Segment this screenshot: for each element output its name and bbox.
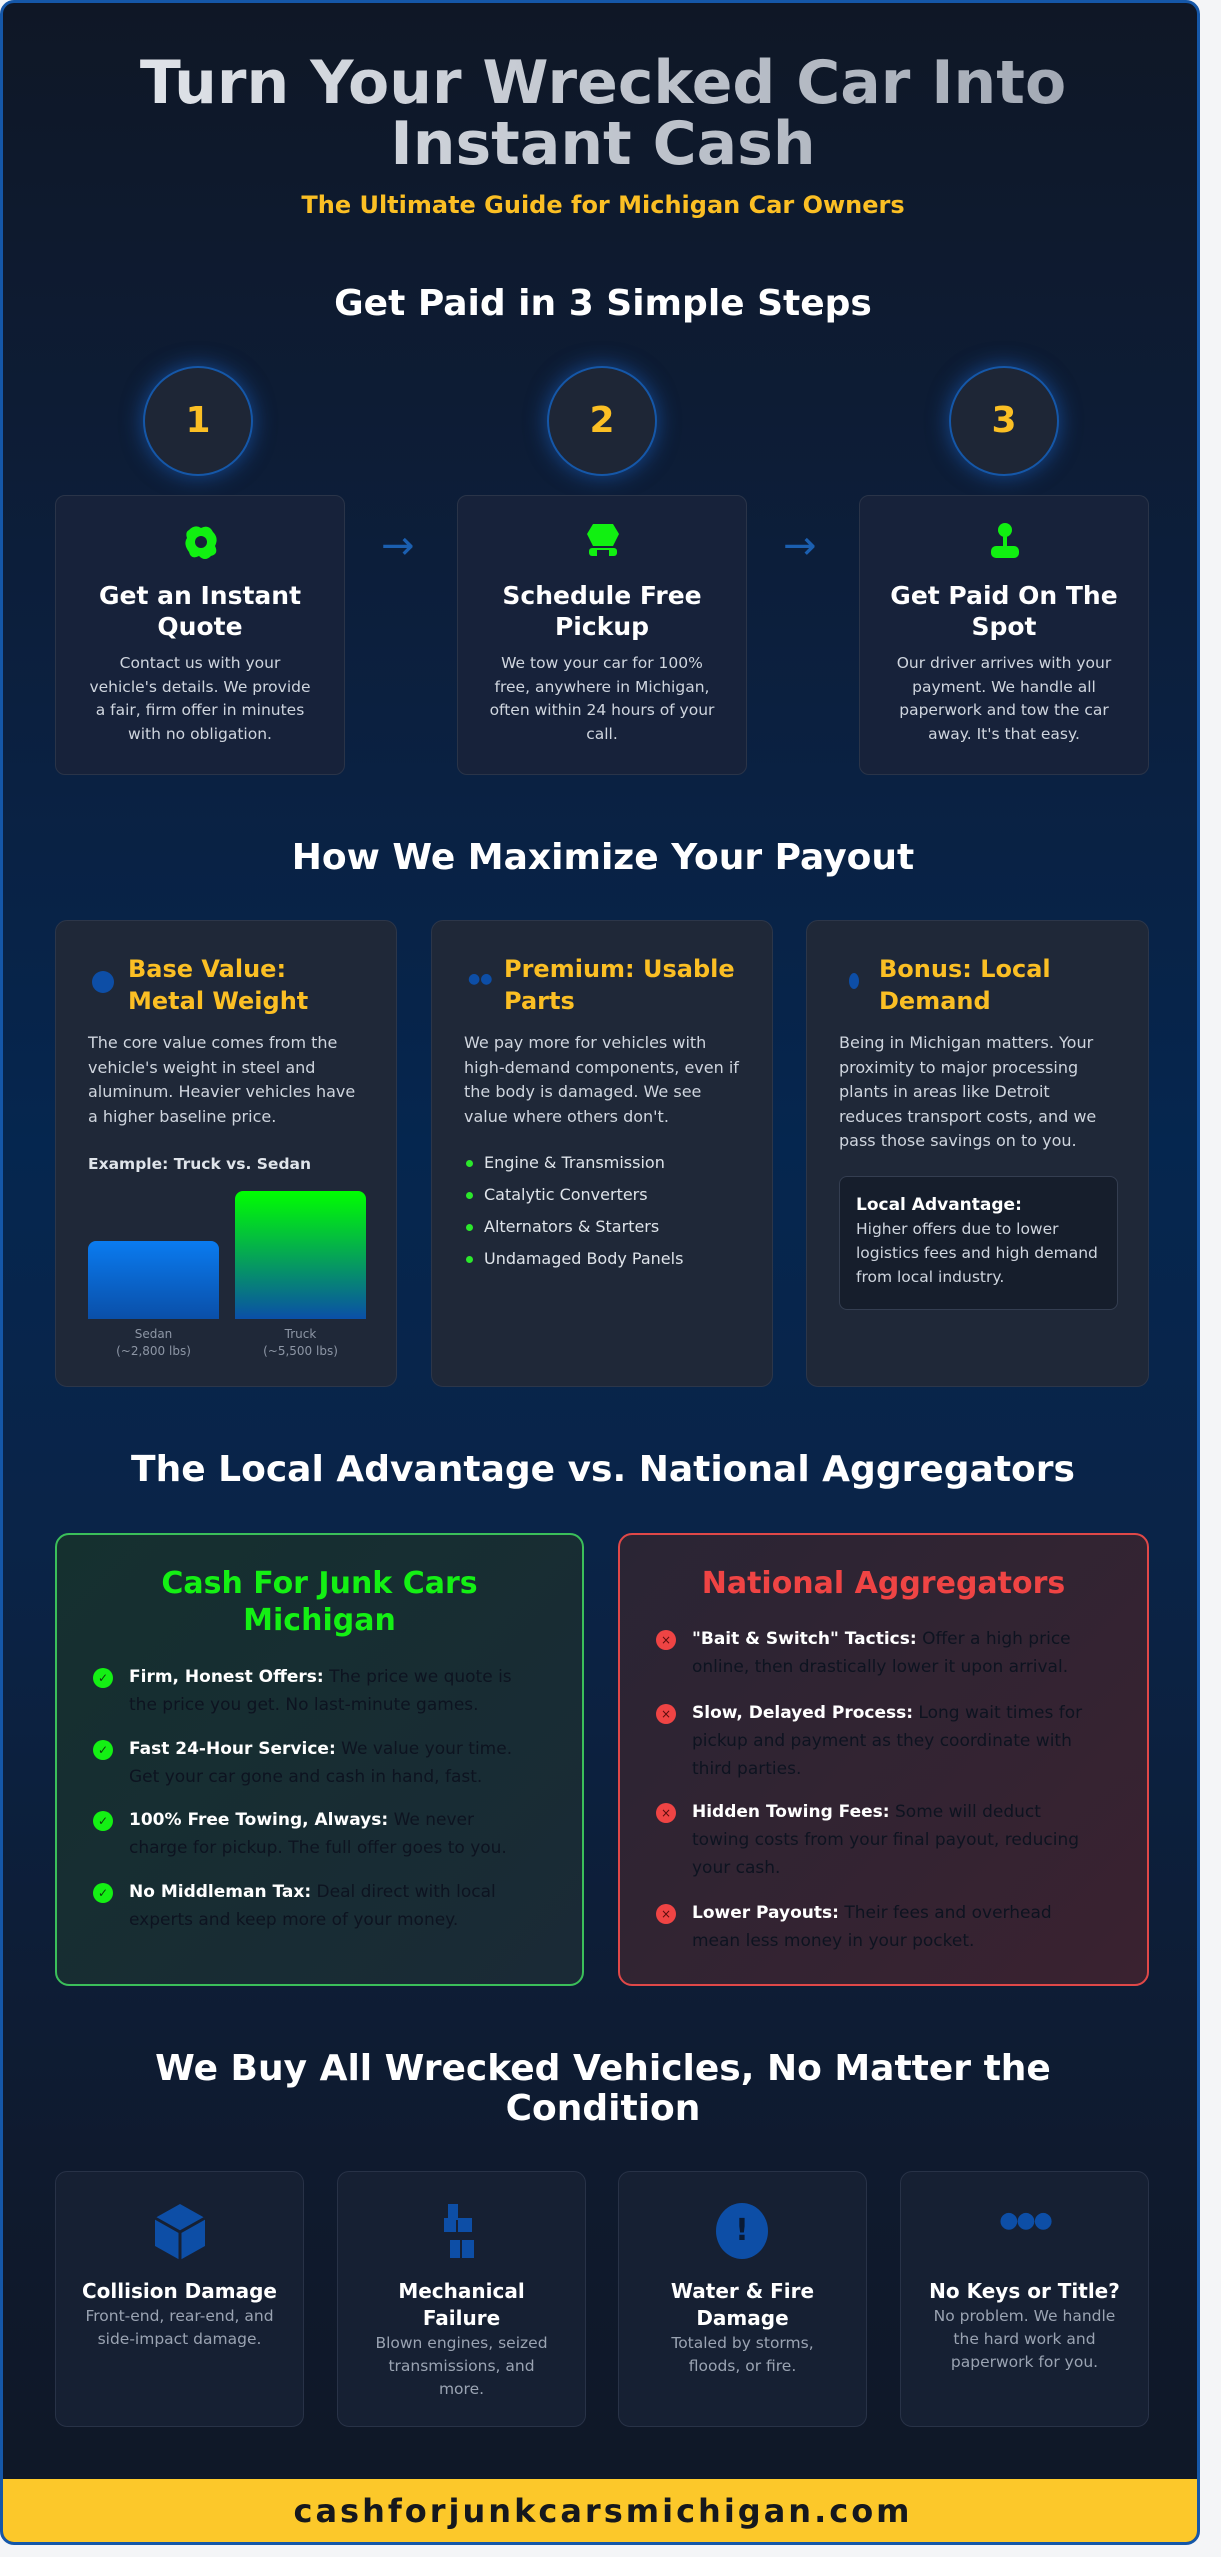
- step circle 3: 3: [991, 400, 1017, 441]
- card: collision: Front-end, rear-end, and: [85, 2307, 274, 2325]
- bar chart: (~2,800 lbs): [116, 1344, 191, 1358]
- chart label: Example: Truck vs. Sedan: [88, 1155, 311, 1173]
- green heading: [161, 1566, 478, 1638]
- footer: [3, 2479, 1203, 2549]
- heading: we buy all: We Buy All Wrecked Vehicles, No Matter the Condition: [155, 2048, 1051, 2129]
- step card 1: [55, 495, 345, 775]
- item: Firm, Honest Offers: The price we quote is the price you get. No last-minute games.: [129, 1667, 512, 1715]
- green heading: Michigan: [243, 1603, 396, 1638]
- step circle 1: [143, 366, 253, 476]
- step card 2: [457, 495, 747, 775]
- card: no keys: No problem. We handle: [934, 2307, 1115, 2325]
- icon: parts: ●●: [468, 971, 492, 987]
- card: mechanical: more.: [439, 2380, 484, 2398]
- panel: us: ✓: [98, 1743, 108, 1757]
- step circle 1: 1: [185, 400, 211, 441]
- title: [3, 53, 1203, 175]
- card: mechanical: Blown engines, seized: [375, 2334, 548, 2352]
- footer: cashforjunkcarsmichigan.com: [293, 2492, 913, 2530]
- step card 1: Contact us with your vehicle's details. We provide a fair, firm offer in minutes with no obligation.: [89, 654, 311, 742]
- item: Hidden Towing Fees: Some will deduct towing costs from your final payout, reducing your cash.: [692, 1802, 1079, 1878]
- panel: premium parts: We pay more for vehicles with high-demand components, even if the body is damaged. We see value where others don't.: [464, 1033, 739, 1126]
- parts list: Engine & Transmission: [484, 1153, 665, 1172]
- panel: aggregators: ×: [661, 1907, 671, 1921]
- panel: us: ✓: [98, 1814, 108, 1828]
- card: water fire: Water & Fire: [671, 2279, 814, 2303]
- item: No Middleman Tax: Deal direct with local experts and keep more of your money.: [129, 1882, 496, 1930]
- card: no keys: the hard work and: [953, 2330, 1096, 2348]
- panel: local demand: Being in Michigan matters. Your proximity to major processing plants in areas like Detroit reduces transport costs, and we pass those savings on to you.: [839, 1033, 1096, 1150]
- subtitle: The Ultimate Guide for Michigan Car Owners: [301, 191, 905, 219]
- panel: local demand: [806, 920, 1149, 1387]
- callout: local advantage: [839, 1176, 1118, 1310]
- heading: steps: Get Paid in 3 Simple Steps: [334, 283, 872, 324]
- icon: cube: [155, 2204, 205, 2260]
- panel: local demand: Bonus: Local Demand: [879, 955, 1051, 1015]
- card: water fire: floods, or fire.: [689, 2357, 796, 2375]
- card: water fire: Totaled by storms,: [671, 2334, 814, 2352]
- item: Slow, Delayed Process: Long wait times for pickup and payment as they coordinate with third parties.: [692, 1703, 1082, 1779]
- title: Turn Your Wrecked Car Into: [140, 48, 1066, 118]
- card: mechanical: [337, 2171, 586, 2427]
- panel: us: [55, 1533, 584, 1986]
- parts list: Catalytic Converters: [484, 1185, 648, 1204]
- item: Lower Payouts: Their fees and overhead mean less money in your pocket.: [692, 1903, 1052, 1951]
- step card 3: Get Paid On The Spot: [890, 581, 1118, 641]
- icon: alert: !: [735, 2213, 749, 2248]
- panel: aggregators: ×: [661, 1633, 671, 1647]
- item: Fast 24-Hour Service: We value your time. Get your car gone and cash in hand, fast.: [129, 1739, 512, 1787]
- icon: pin: [991, 523, 1019, 558]
- icon: coin: [92, 971, 114, 993]
- icon: location: [849, 973, 859, 989]
- bar chart: Truck: [285, 1327, 316, 1341]
- bar chart: Sedan: [135, 1327, 172, 1341]
- callout: local advantage: Local Advantage:: [856, 1195, 1022, 1215]
- panel: aggregators: [618, 1533, 1149, 1986]
- step card 3: [859, 495, 1149, 775]
- green heading: Cash For Junk Cars: [161, 1566, 478, 1601]
- callout: local advantage: Higher offers due to lower logistics fees and high demand from local industry.: [856, 1220, 1098, 1286]
- panel: premium parts: Premium: Usable Parts: [504, 955, 735, 1015]
- title: Instant Cash: [390, 109, 816, 179]
- card: mechanical: Mechanical: [398, 2279, 525, 2303]
- panel: aggregators: ×: [661, 1707, 671, 1721]
- panel: premium parts: [431, 920, 773, 1387]
- heading: payout: How We Maximize Your Payout: [292, 837, 914, 878]
- arrow 2: →: [783, 523, 817, 569]
- parts list: [466, 1153, 683, 1268]
- panel: base value: [55, 920, 397, 1387]
- step card 2: We tow your car for 100% free, anywhere in Michigan, often within 24 hours of your call.: [490, 654, 714, 742]
- card: mechanical: transmissions, and: [388, 2357, 535, 2375]
- item: "Bait & Switch" Tactics: Offer a high price online, then drastically lower it upon arrival.: [692, 1629, 1071, 1677]
- panel: us: ✓: [98, 1886, 108, 1900]
- parts list: Undamaged Body Panels: [484, 1249, 683, 1268]
- card: no keys: paperwork for you.: [951, 2353, 1098, 2371]
- card: no keys: [900, 2171, 1149, 2427]
- card: collision: [55, 2171, 304, 2427]
- panel: base value: The core value comes from the vehicle's weight in steel and aluminum. Heavier vehicles have a higher baseline price.: [88, 1033, 355, 1126]
- icon: truck: [587, 524, 619, 556]
- step circle 2: 2: [589, 400, 615, 441]
- bar chart: (~5,500 lbs): [263, 1344, 338, 1358]
- parts list: Alternators & Starters: [484, 1217, 659, 1236]
- heading: comparison: The Local Advantage vs. National Aggregators: [131, 1449, 1075, 1490]
- step circle 2: [547, 366, 657, 476]
- bar chart: [88, 1191, 366, 1358]
- item: 100% Free Towing, Always: We never charge for pickup. The full offer goes to you.: [129, 1810, 507, 1858]
- card: no keys: No Keys or Title?: [929, 2279, 1120, 2303]
- icon: gear: [185, 526, 217, 559]
- panel: aggregators: ×: [661, 1806, 671, 1820]
- card: water fire: [618, 2171, 867, 2427]
- arrow 1: →: [381, 523, 415, 569]
- card: collision: side-impact damage.: [98, 2330, 261, 2348]
- icon: parts: [444, 2204, 474, 2258]
- step card 1: Get an Instant Quote: [99, 581, 301, 641]
- step circle 3: [949, 366, 1059, 476]
- card: water fire: Damage: [696, 2306, 789, 2330]
- panel: us: ✓: [98, 1671, 108, 1685]
- panel: base value: Base Value: Metal Weight: [128, 955, 308, 1015]
- icon: alert: [716, 2203, 768, 2259]
- red heading: National Aggregators: [702, 1566, 1065, 1601]
- step card 3: Our driver arrives with your payment. We handle all paperwork and tow the car away. It's that easy.: [897, 654, 1111, 742]
- card: collision: Collision Damage: [82, 2279, 277, 2303]
- step card 2: Schedule Free Pickup: [502, 581, 702, 641]
- card: mechanical: Failure: [423, 2306, 500, 2330]
- icon: keys: ●●●: [999, 2208, 1051, 2233]
